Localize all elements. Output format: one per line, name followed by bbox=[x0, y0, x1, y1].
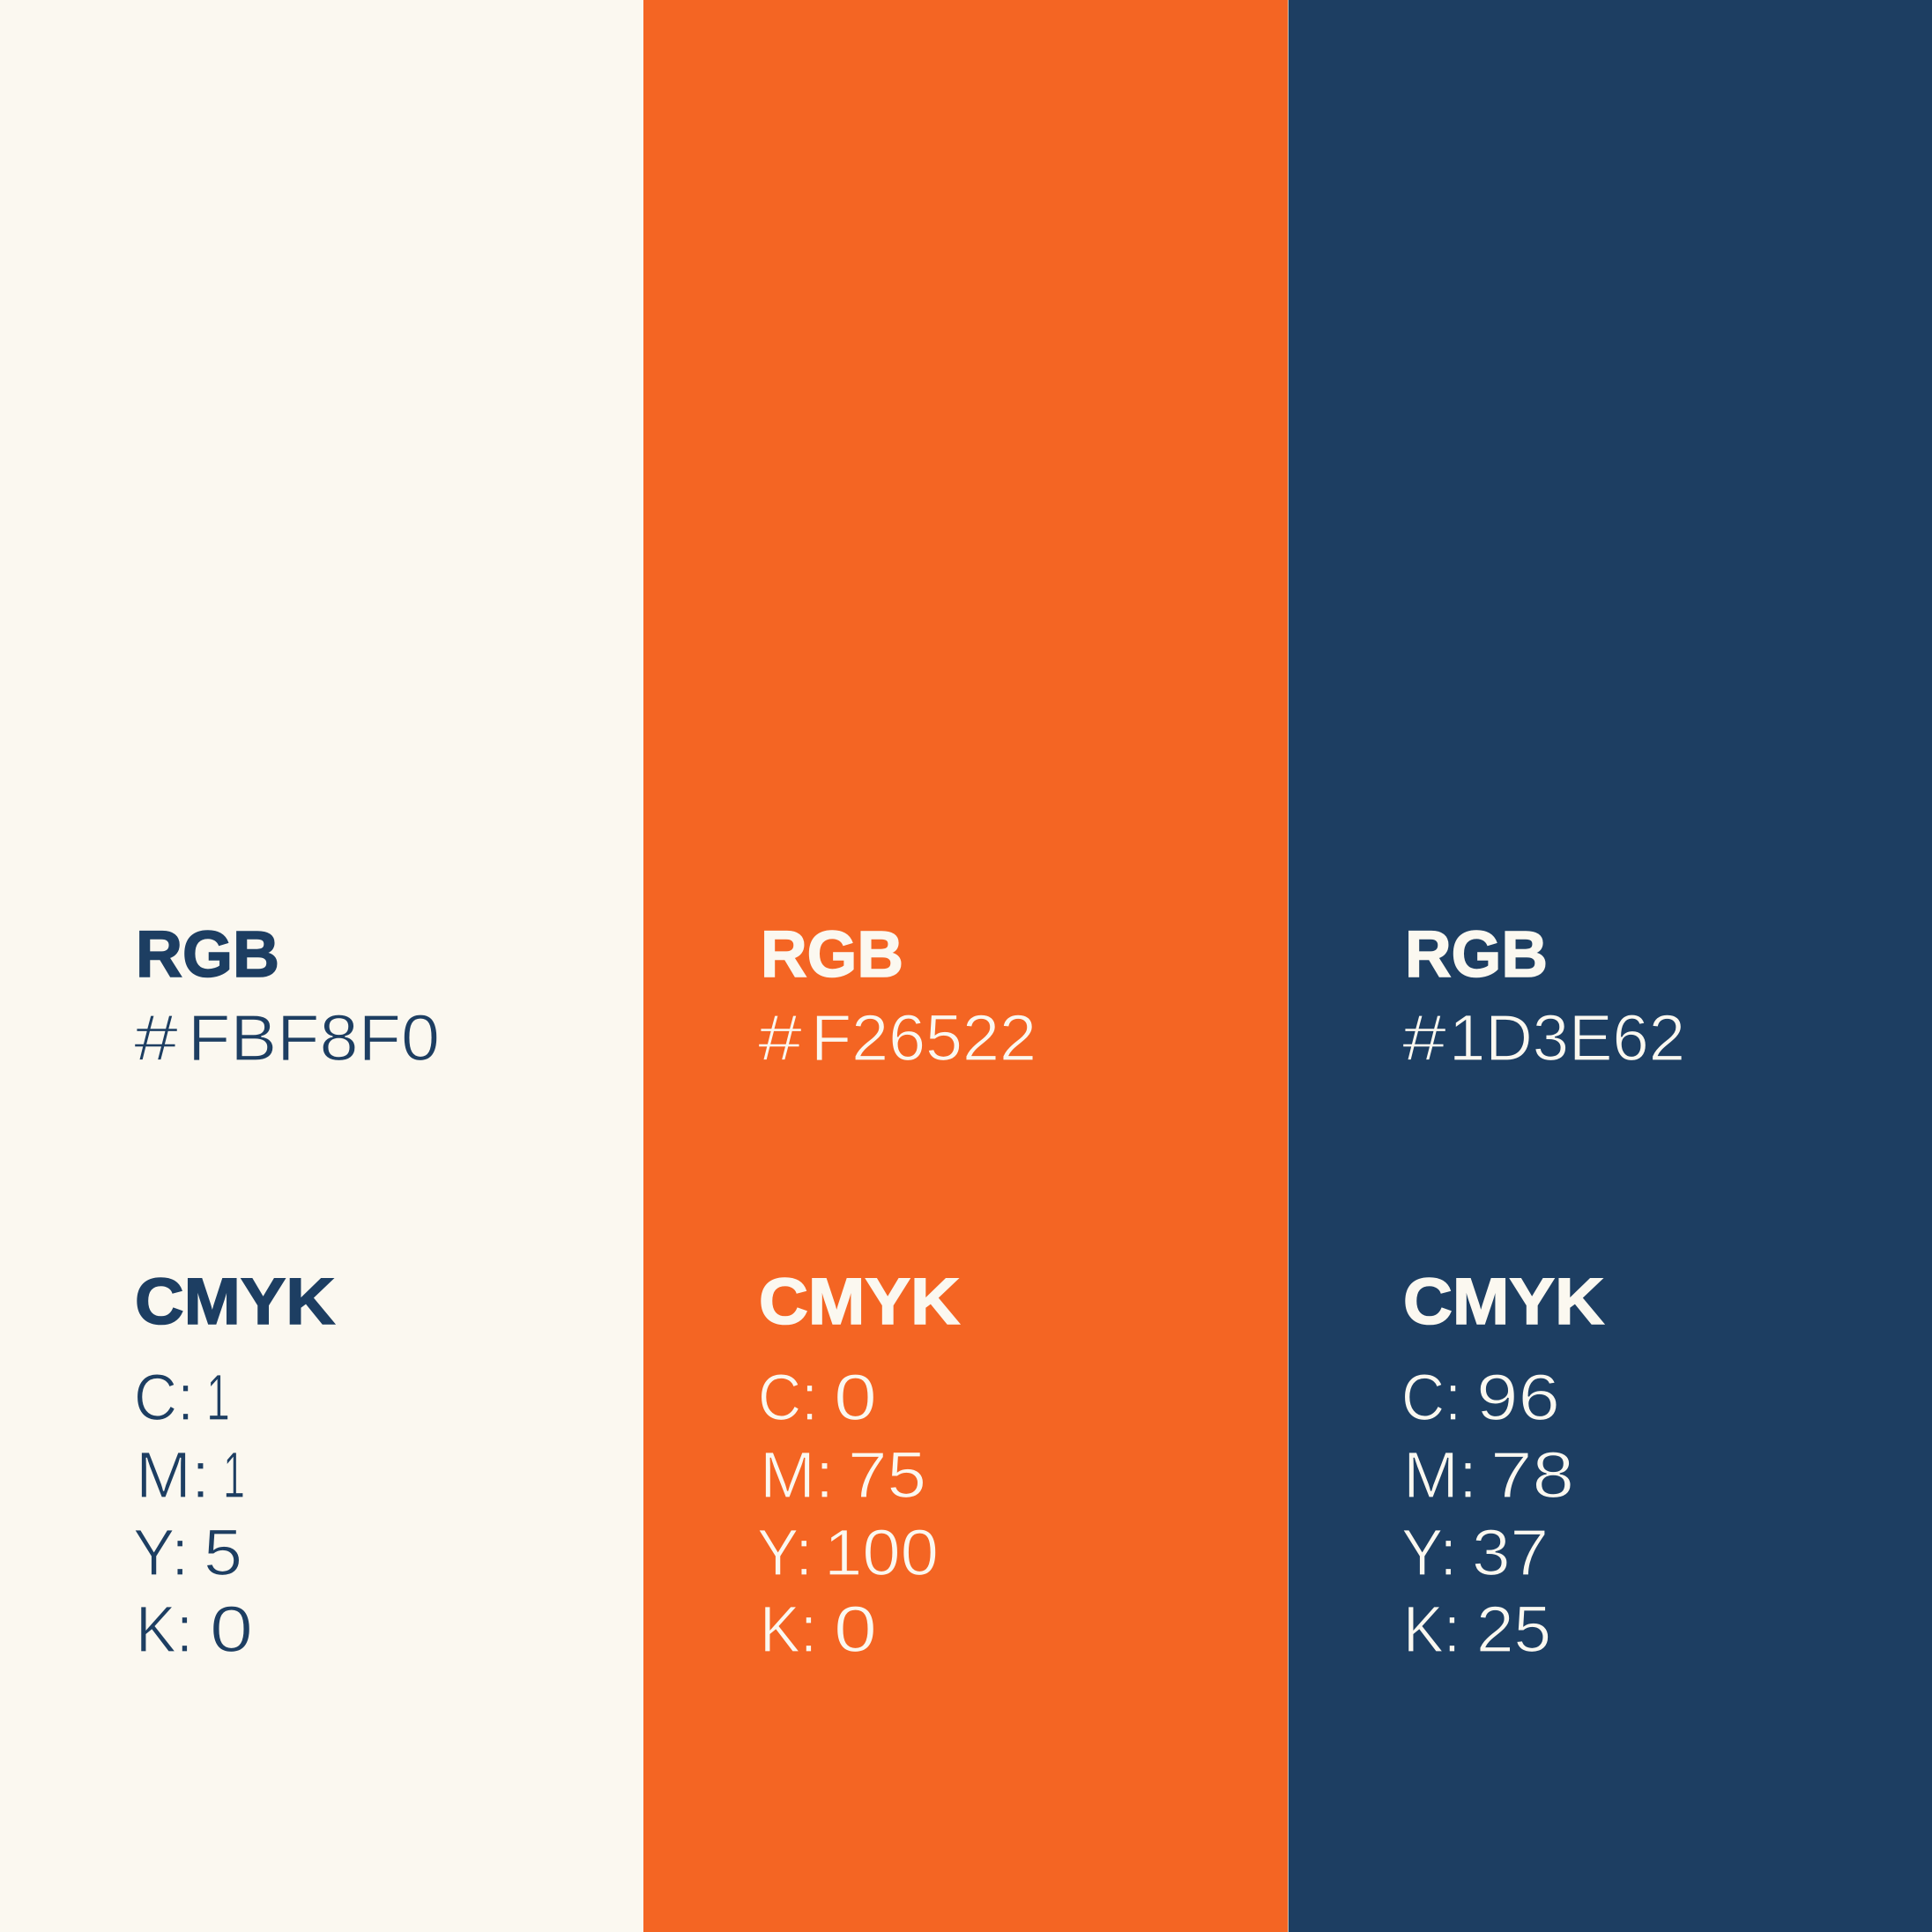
cmyk values: Y: bbox=[1401, 1516, 1457, 1589]
cmyk values: M: bbox=[1403, 1438, 1477, 1512]
cmyk values: C: bbox=[134, 1361, 194, 1434]
cmyk values: M: bbox=[760, 1438, 834, 1512]
cmyk values: K: bbox=[136, 1593, 193, 1666]
cmyk values: 78 bbox=[1490, 1438, 1574, 1512]
cmyk values: 75 bbox=[848, 1438, 926, 1512]
panel: cream swatch bbox=[0, 0, 643, 1932]
cmyk values: 1 bbox=[206, 1361, 230, 1434]
panel: navy swatch bbox=[1288, 0, 1932, 1932]
heading: RGB: RGB bbox=[1405, 918, 1548, 991]
hex value: F26522 bbox=[811, 1001, 1037, 1074]
cmyk values: 5 bbox=[204, 1516, 242, 1589]
heading: CMYK: CMYK bbox=[135, 1265, 335, 1338]
cmyk values bbox=[1401, 1361, 1574, 1666]
cmyk values: 0 bbox=[834, 1593, 877, 1666]
heading: RGB: RGB bbox=[136, 918, 279, 991]
cmyk values bbox=[757, 1361, 939, 1666]
hex value: 1D3E62 bbox=[1449, 1001, 1685, 1074]
cmyk values: Y: bbox=[757, 1516, 813, 1589]
cmyk values: C: bbox=[1401, 1361, 1461, 1434]
hex value: # bbox=[1402, 1001, 1446, 1074]
cmyk values bbox=[133, 1361, 253, 1666]
cmyk values: K: bbox=[1403, 1593, 1460, 1666]
cmyk values: 37 bbox=[1472, 1516, 1549, 1589]
heading: CMYK: CMYK bbox=[1403, 1265, 1604, 1338]
cmyk values: C: bbox=[758, 1361, 818, 1434]
cmyk values: M: bbox=[136, 1438, 210, 1512]
cmyk values: 1 bbox=[223, 1438, 245, 1512]
cmyk values: 25 bbox=[1476, 1593, 1551, 1666]
cmyk values: 96 bbox=[1476, 1361, 1560, 1434]
heading: RGB: RGB bbox=[761, 918, 903, 991]
cmyk values: Y: bbox=[133, 1516, 189, 1589]
panel: orange swatch bbox=[643, 0, 1288, 1932]
heading: CMYK: CMYK bbox=[759, 1265, 960, 1338]
hex value: FBF8F0 bbox=[188, 1001, 440, 1074]
cmyk values: 0 bbox=[834, 1361, 877, 1434]
cmyk values: 0 bbox=[210, 1593, 253, 1666]
cmyk values: K: bbox=[760, 1593, 817, 1666]
cmyk values: 100 bbox=[824, 1516, 939, 1589]
hex value: # bbox=[134, 1001, 178, 1074]
hex value: # bbox=[758, 1001, 802, 1074]
